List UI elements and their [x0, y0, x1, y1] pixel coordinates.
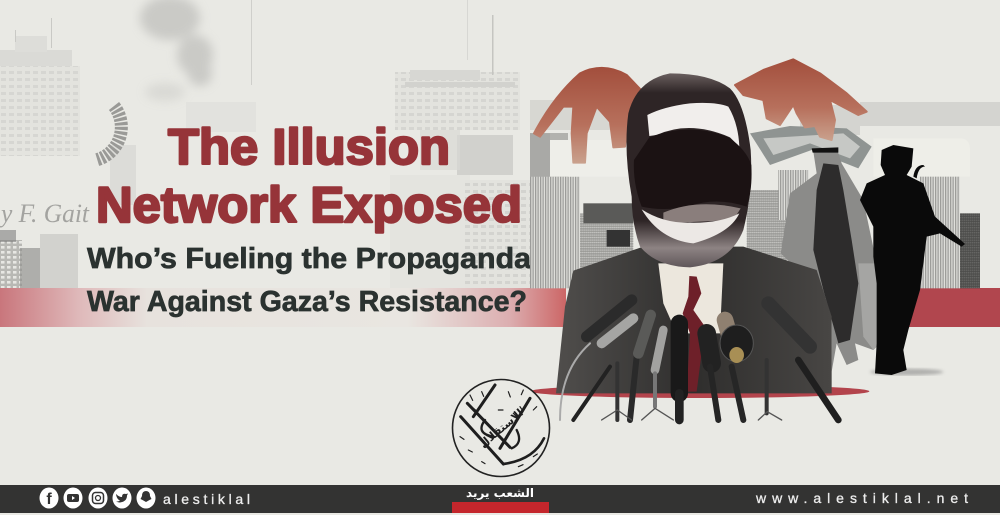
title: The Illusion: [168, 119, 450, 175]
mouth lips: [626, 73, 751, 267]
right skyline strip: [530, 100, 1000, 189]
lower teeth: [642, 209, 739, 243]
tongue: [663, 204, 741, 223]
suit jacket: [556, 247, 832, 393]
red band left: [0, 288, 566, 327]
footer url: www.alestiklal.net: [755, 490, 968, 506]
subtitle: Who’s Fueling the Propaganda: [87, 243, 532, 275]
mast and low building: [186, 0, 256, 132]
necktie: [683, 276, 705, 392]
seal emblem left: [96, 106, 121, 160]
mouth interior: [634, 129, 752, 209]
soldier silhouette: [860, 145, 965, 375]
title: Network Exposed: [96, 177, 522, 233]
right-of-title faded buildings: [390, 130, 535, 288]
title: [96, 119, 522, 233]
seal behind hands: [750, 126, 872, 168]
upper teeth: [647, 103, 739, 147]
shirt: [658, 263, 723, 333]
logo seal: [452, 380, 550, 476]
left tower building: [0, 18, 80, 156]
footer handle: alestiklal: [163, 491, 250, 507]
subtitle: [87, 243, 532, 318]
smoke plume: [140, 0, 213, 101]
footer red tab: [452, 502, 549, 513]
footer bar: [0, 485, 1000, 513]
logo seal: الاستقلال: [477, 406, 526, 450]
faint city skyline background: [0, 0, 1000, 288]
subtitle: War Against Gaza’s Resistance?: [87, 286, 527, 318]
left hand: [534, 68, 643, 163]
buildings behind figures: [530, 133, 980, 288]
central building: [395, 0, 520, 130]
red band right: [880, 288, 1000, 327]
right hand: [735, 59, 867, 140]
microphones: [560, 300, 838, 420]
arab man figure: [781, 147, 891, 372]
red floor ellipse: [531, 385, 869, 398]
footer slogan: الشعب يريد: [466, 486, 534, 500]
signature script: y F. Gait: [0, 199, 90, 228]
social icons: f: [46, 491, 52, 508]
calligraphy: [460, 385, 544, 467]
collage illustration: [530, 59, 980, 420]
social icons: [40, 488, 156, 508]
left buildings: [0, 145, 136, 288]
